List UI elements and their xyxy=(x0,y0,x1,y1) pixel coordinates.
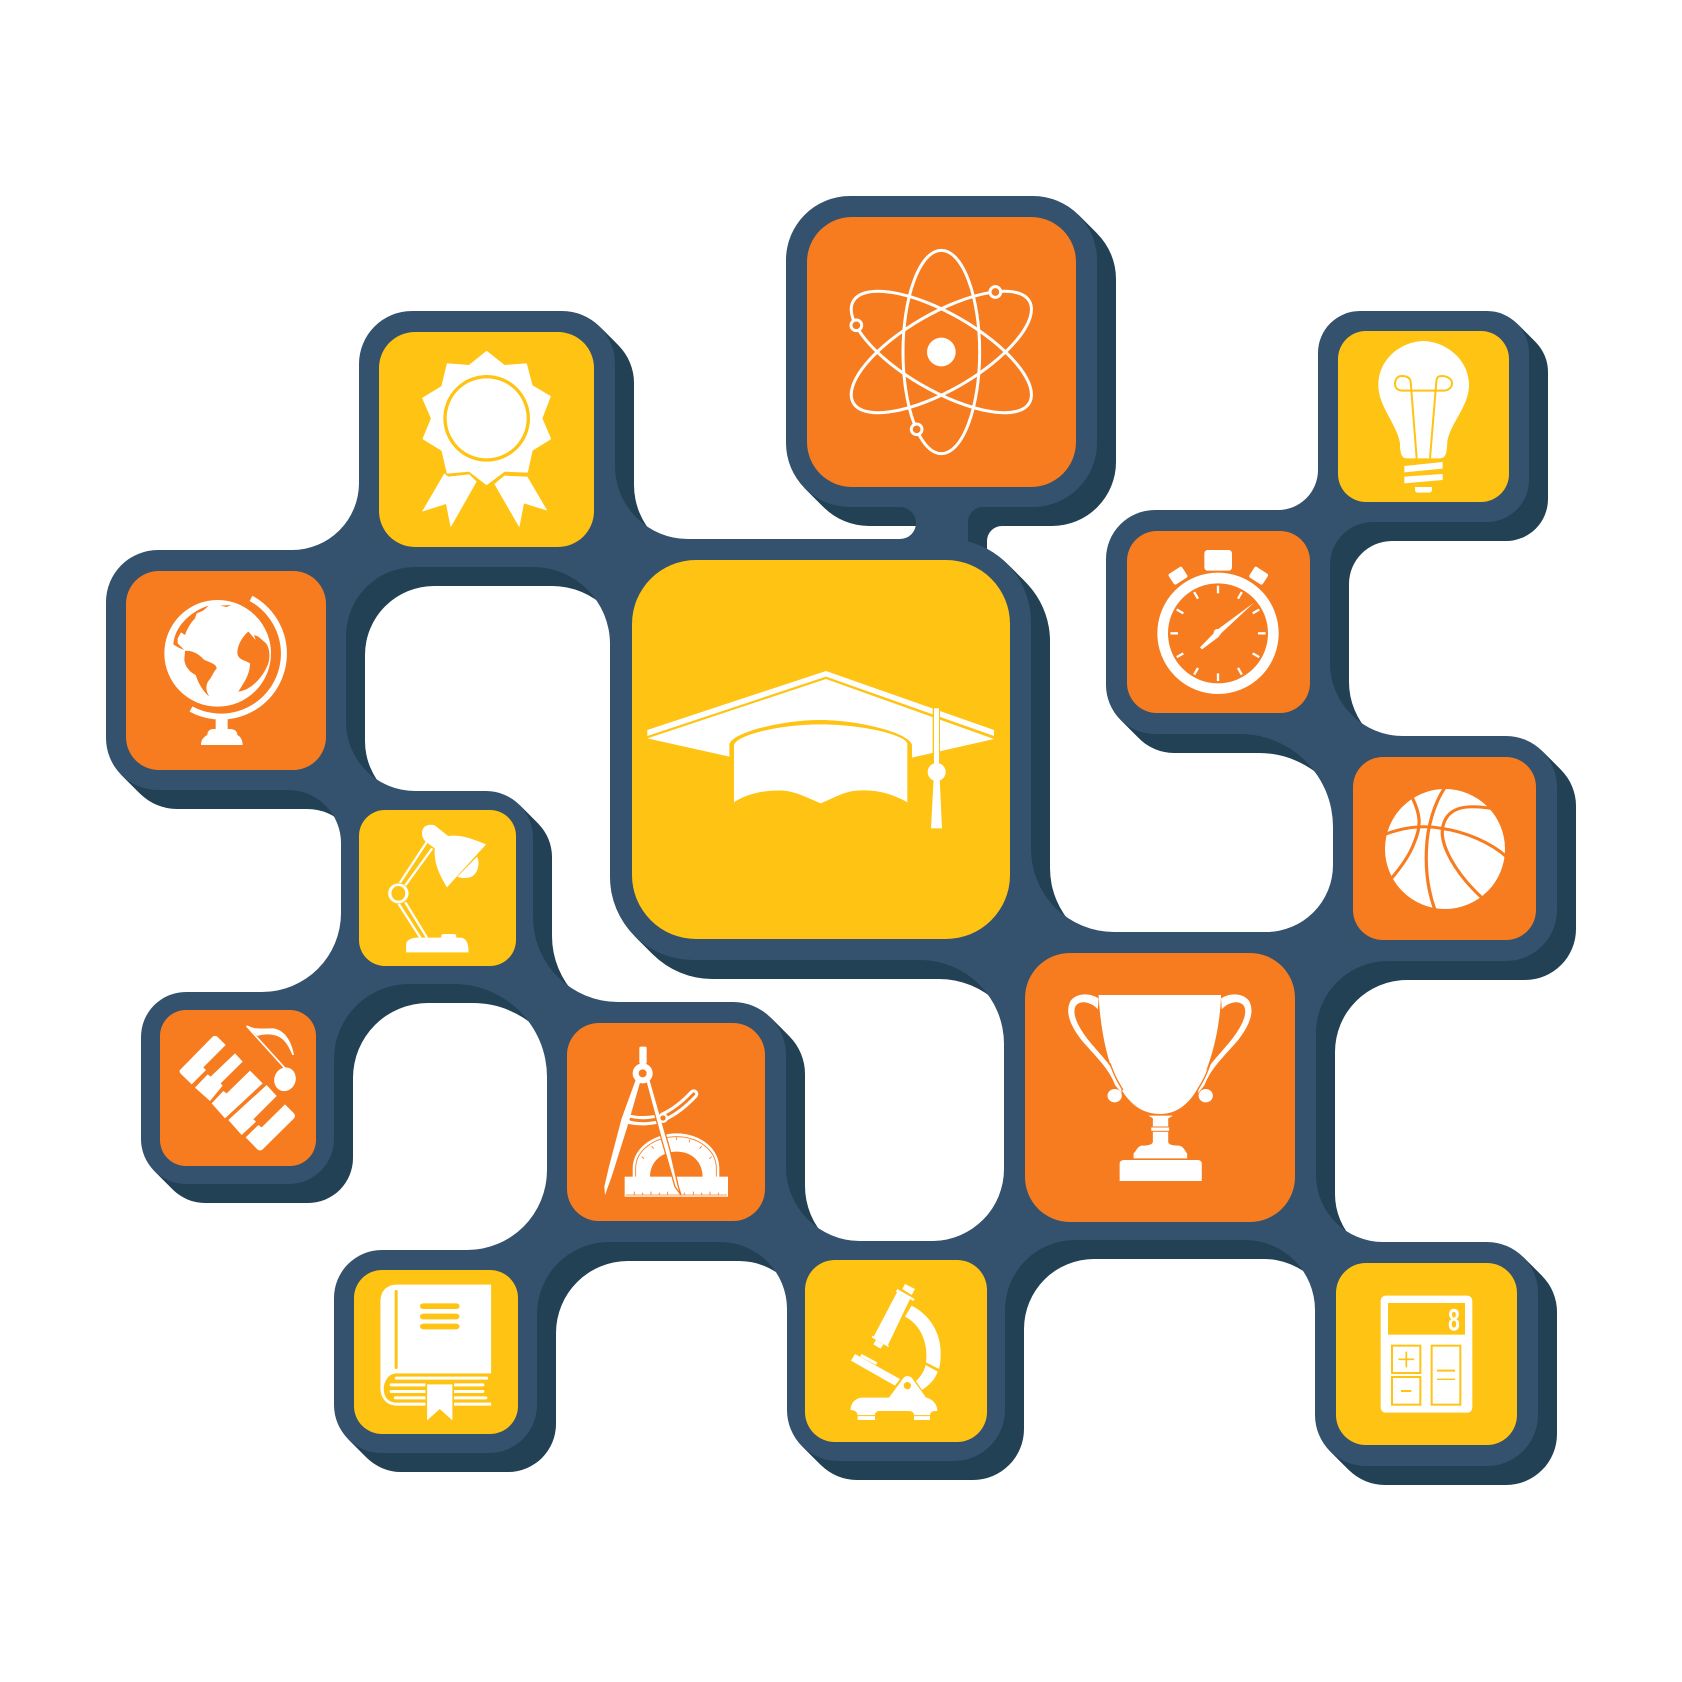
tile: book xyxy=(354,1270,518,1434)
icon: book with bookmark xyxy=(380,1285,491,1420)
panel: microscope xyxy=(805,1260,987,1442)
tile: piano xyxy=(160,1010,316,1166)
panel: compass and protractor xyxy=(567,1023,765,1221)
icon: basketball xyxy=(1385,787,1506,910)
icon: award ribbon xyxy=(422,352,550,527)
panel: piano and music note xyxy=(160,1010,316,1166)
panel: desk lamp xyxy=(359,810,516,966)
panel: light bulb xyxy=(1338,331,1509,502)
tile: graduation cap xyxy=(632,560,1010,939)
panel: stopwatch xyxy=(1127,531,1310,713)
tile: calculator xyxy=(1336,1263,1517,1445)
panel: globe xyxy=(126,571,326,770)
icon: calculator xyxy=(1381,1296,1472,1413)
calculator display digit: 8 xyxy=(1448,1303,1460,1340)
panel: award xyxy=(379,332,594,547)
icon: compass and protractor xyxy=(604,1047,728,1197)
icon: stopwatch xyxy=(1163,550,1273,689)
icon: graduation cap xyxy=(647,671,994,828)
tile: basketball xyxy=(1353,757,1536,940)
tile: light bulb xyxy=(1338,331,1509,502)
icon: globe xyxy=(164,598,284,745)
tile: trophy xyxy=(1025,953,1295,1222)
icon: light bulb xyxy=(1378,341,1469,493)
icon: piano keys and note xyxy=(180,1025,299,1150)
panel: calculator xyxy=(1336,1263,1517,1445)
tile: award xyxy=(379,332,594,547)
tile: stopwatch xyxy=(1127,531,1310,713)
icon: atom xyxy=(834,250,1049,454)
tile: atom xyxy=(807,217,1076,487)
network front face xyxy=(106,196,1557,1466)
panel: basketball xyxy=(1353,757,1536,940)
tile: compass xyxy=(567,1023,765,1221)
icon: microscope xyxy=(851,1284,941,1420)
tile: globe xyxy=(126,571,326,770)
panel: book xyxy=(354,1270,518,1434)
panel: graduation cap xyxy=(632,560,1010,939)
panel: atom xyxy=(807,217,1076,487)
tile: desk lamp xyxy=(359,810,516,966)
icon: trophy xyxy=(1068,994,1251,1181)
icon: desk lamp xyxy=(388,825,486,952)
panel: trophy xyxy=(1025,953,1295,1222)
tile: microscope xyxy=(805,1260,987,1442)
network extruded shadow xyxy=(107,197,1576,1485)
